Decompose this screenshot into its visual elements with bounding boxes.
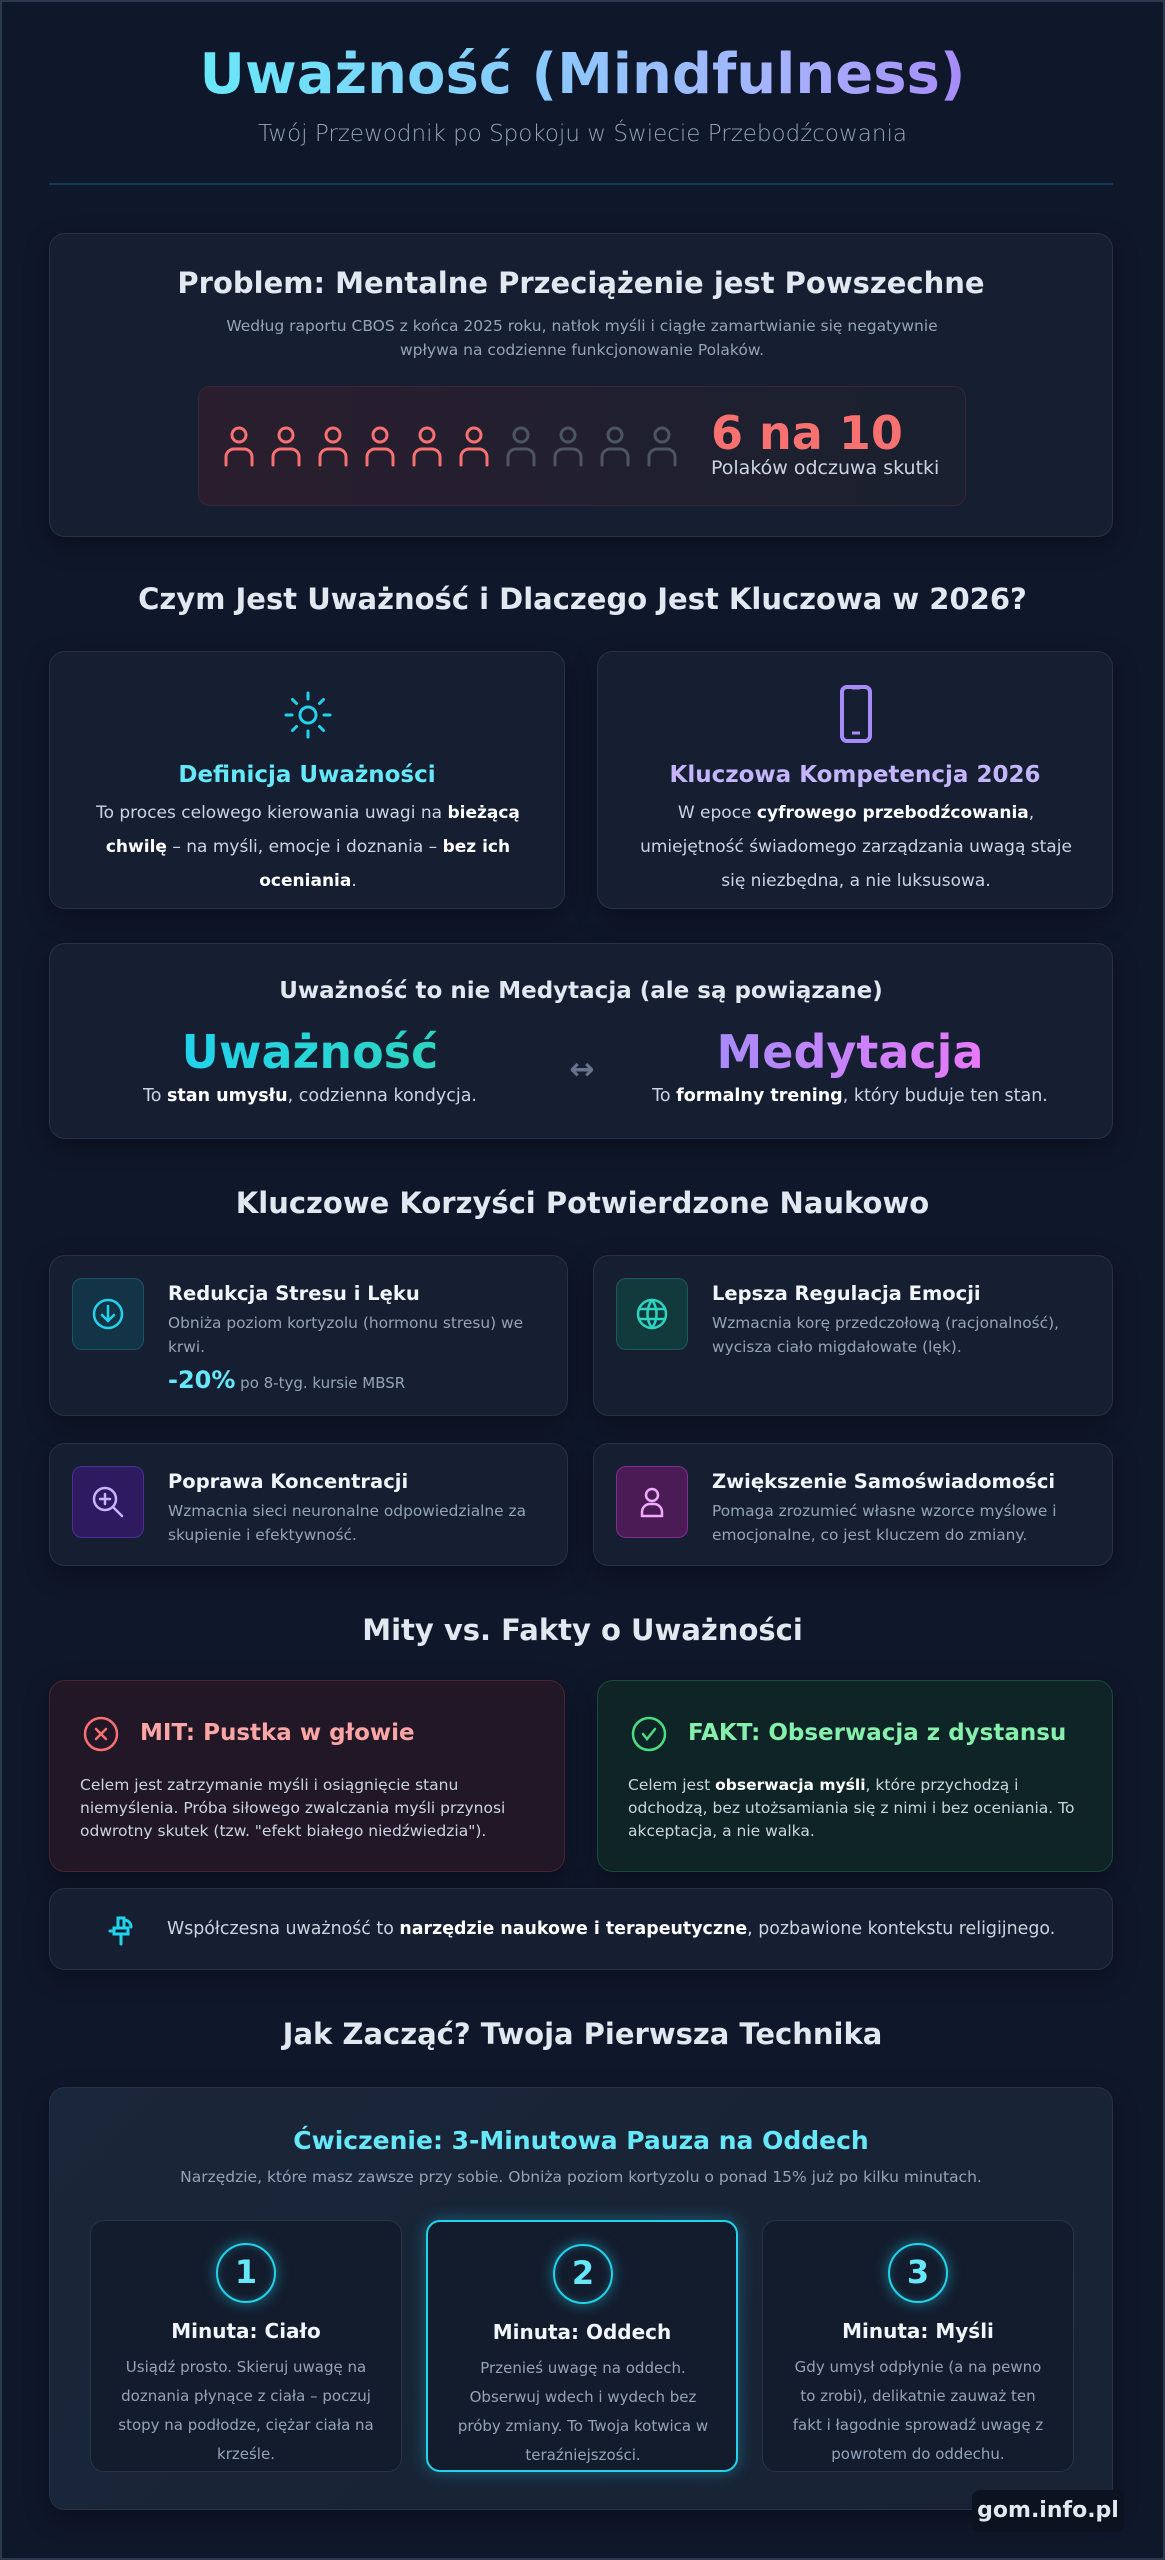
problem text: Według raportu CBOS z końca 2025 roku, natłok myśli i ciągłe zamartwianie się negatywnie wpływa na codzienne funkcjonowanie Polaków. [226, 317, 938, 359]
mindfulness side [142, 1025, 477, 1106]
icon: zoom [72, 1466, 144, 1538]
icon: check circle [632, 1716, 666, 1752]
icon: globe [616, 1278, 688, 1350]
step 3 [762, 2220, 1074, 2472]
step 3: to zrobi), delikatnie zauważ ten [800, 2387, 1036, 2405]
benefit: emotions: Lepsza Regulacja Emocji [712, 1282, 981, 1305]
step 2 [426, 2220, 738, 2472]
meditation side: To formalny trening, który buduje ten stan. [652, 1086, 1048, 1106]
icon: x circle [84, 1716, 118, 1752]
step 2: Minuta: Oddech [493, 2320, 671, 2344]
definition title: Definicja Uważności [178, 762, 436, 788]
competence title: Kluczowa Kompetencja 2026 [670, 762, 1040, 788]
compare heading: Uważność to nie Medytacja (ale są powiązane) [279, 978, 883, 1004]
benefit: stress: Obniża poziom kortyzolu (hormonu stresu) we krwi. [168, 1314, 523, 1356]
icon: tool [108, 1916, 132, 1946]
icon: arrow down [72, 1278, 144, 1350]
section heading: myths: Mity vs. Fakty o Uważności [362, 1613, 803, 1647]
step 2: Przenieś uwagę na oddech. Obserwuj wdech i wydech bez próby zmiany. To Twoja kotwica w teraźniejszości. [458, 2359, 708, 2464]
panel: fact [597, 1680, 1113, 1872]
exercise title: Ćwiczenie: 3-Minutowa Pauza na Oddech [293, 2126, 869, 2155]
benefit: stress [49, 1255, 568, 1416]
icon: person [616, 1466, 688, 1538]
section heading: how to start: Jak Zacząć? Twoja Pierwsza Technika [283, 2017, 882, 2051]
benefit: emotions [593, 1255, 1113, 1416]
panel: myth [49, 1680, 565, 1872]
problem heading: Problem: Mentalne Przeciążenie jest Powszechne [177, 266, 985, 300]
benefit: focus: Wzmacnia sieci neuronalne odpowiedzialne za skupienie i efektywność. [168, 1502, 526, 1544]
icons: people [224, 426, 676, 466]
benefit: focus: Poprawa Koncentracji [168, 1470, 408, 1493]
benefit: self-awareness [593, 1443, 1113, 1566]
stat box [198, 386, 966, 506]
panel: exercise [49, 2087, 1113, 2510]
subtitle: Twój Przewodnik po Spokoju w Świecie Przebodźcowania [258, 121, 907, 147]
badge: gom.info.pl [972, 2490, 1124, 2532]
step 3: fakt i łagodnie sprowadź uwagę z [793, 2416, 1043, 2434]
step 3: Minuta: Myśli [842, 2319, 994, 2343]
stat label: Polaków odczuwa skutki [711, 457, 939, 479]
competence text [640, 803, 1072, 891]
benefit: emotions: Wzmacnia korę przedczołową (racjonalność), wycisza ciało migdałowate (lęk). [712, 1314, 1059, 1356]
section heading: what is: Czym Jest Uważność i Dlaczego Jest Kluczowa w 2026? [138, 582, 1027, 616]
badge: gom.info.pl: gom.info.pl [977, 2498, 1119, 2523]
meditation side [652, 1025, 1048, 1106]
stat -20%: -20% po 8-tyg. kursie MBSR [168, 1366, 405, 1394]
meditation side: Medytacja [716, 1025, 984, 1079]
panel: mindfulness vs meditation [49, 943, 1113, 1139]
step 1 [90, 2220, 402, 2472]
benefit: focus [49, 1443, 568, 1566]
benefit: stress: Redukcja Stresu i Lęku [168, 1282, 420, 1305]
title: Uważność (Mindfulness) [200, 42, 965, 107]
note text: Współczesna uważność to narzędzie naukowe i terapeutyczne, pozbawione kontekstu religijnego. [167, 1919, 1055, 1939]
arrow: ↔ [569, 1052, 595, 1087]
myth title: MIT: Pustka w głowie [140, 1720, 415, 1746]
mindfulness side: To stan umysłu, codzienna kondycja. [143, 1086, 477, 1106]
step 1: Usiądź prosto. Skieruj uwagę na doznania płynące z ciała – poczuj stopy na podłodze, ciężar ciała na krześle. [118, 2358, 374, 2463]
step 3: Gdy umysł odpłynie (a na pewno [795, 2358, 1041, 2376]
step 1: Minuta: Ciało [171, 2319, 321, 2343]
stat number: 6 na 10 [711, 406, 903, 460]
step 3: 3 [907, 2253, 929, 2291]
mindfulness side: Uważność [182, 1025, 438, 1079]
step 3: powrotem do oddechu. [831, 2445, 1005, 2463]
icon: phone [840, 685, 872, 743]
fact title: FAKT: Obserwacja z dystansu [688, 1720, 1066, 1746]
definition text: To proces celowego kierowania uwagi na bieżącą chwilę – na myśli, emocje i doznania – bez ich oceniania. [96, 803, 520, 891]
note bar [49, 1888, 1113, 1970]
myth text: Celem jest zatrzymanie myśli i osiągnięcie stanu niemyślenia. Próba siłowego zwalczania myśli przynosi odwrotny skutek (tzw. "efekt białego niedźwiedzia"). [80, 1776, 505, 1840]
panel: definition [49, 651, 565, 909]
icon: sun [284, 692, 332, 738]
step 1: 1 [235, 2253, 257, 2291]
benefit: self-awareness: Zwiększenie Samoświadomości [712, 1470, 1055, 1493]
section heading: benefits: Kluczowe Korzyści Potwierdzone Naukowo [236, 1186, 929, 1220]
step 2: 2 [572, 2254, 594, 2292]
competence text: umiejętność świadomego zarządzania uwagą staje się niezbędna, a nie luksusowa. [640, 837, 1072, 891]
fact text: Celem jest obserwacja myśli, które przychodzą i odchodzą, bez utożsamiania się z nimi i bez oceniania. To akceptacja, a nie walka. [628, 1776, 1074, 1840]
exercise subtitle: Narzędzie, które masz zawsze przy sobie. Obniża poziom kortyzolu o ponad 15% już po kilku minutach. [180, 2168, 982, 2186]
benefit: self-awareness: Pomaga zrozumieć własne wzorce myślowe i emocjonalne, co jest kluczem do zmiany. [712, 1502, 1057, 1544]
competence text: W epoce cyfrowego przebodźcowania, [678, 803, 1034, 823]
panel: problem [49, 233, 1113, 537]
panel: competence [597, 651, 1113, 909]
